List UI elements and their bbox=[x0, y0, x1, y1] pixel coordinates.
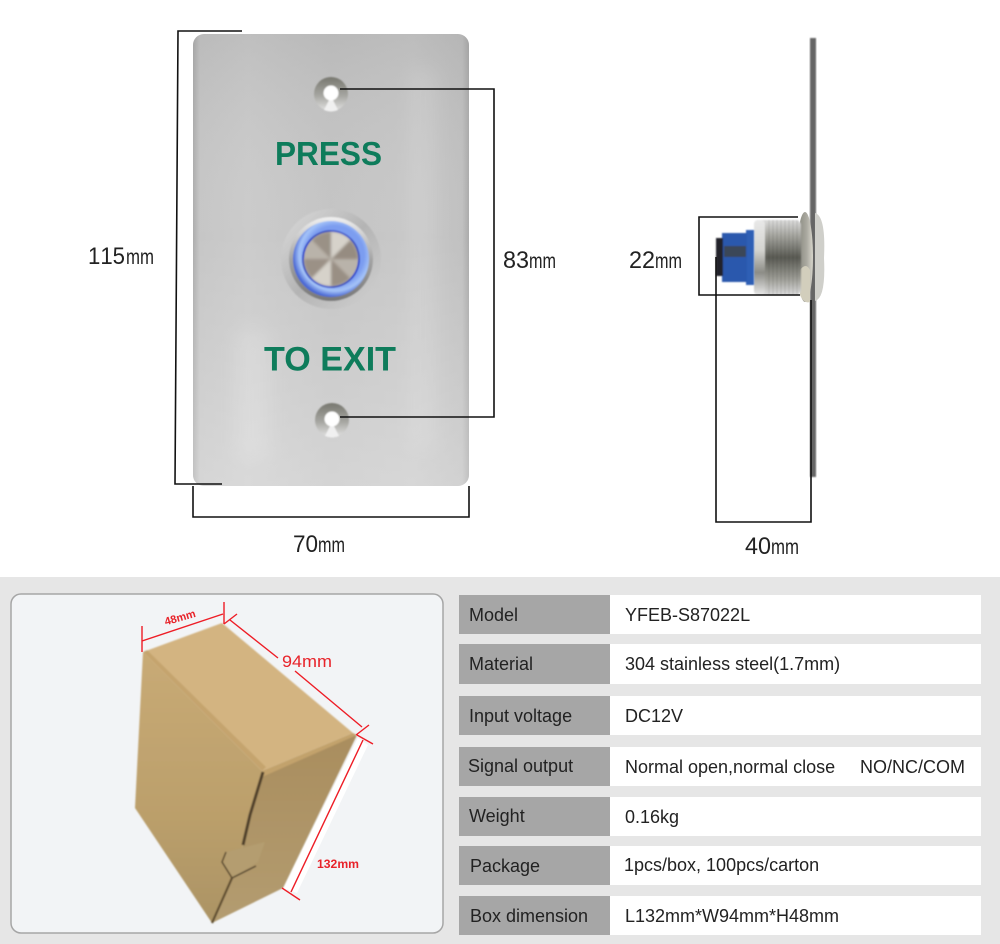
row: Model: YFEB-S87022L bbox=[625, 605, 750, 625]
row: Signal output: Normal open,normal close bbox=[625, 757, 835, 777]
row: Weight: 0.16kg bbox=[625, 807, 679, 827]
row: Box dimension bbox=[459, 896, 981, 935]
dimension: 94mm: 94mm bbox=[282, 652, 332, 671]
dimension: 132mm: 132mm bbox=[317, 859, 359, 871]
dimension: 48mm: 48mm bbox=[163, 608, 197, 628]
row: Package bbox=[459, 846, 981, 885]
dimension: 22mm diameter: mm bbox=[655, 250, 682, 273]
row: Input voltage: DC12V bbox=[625, 706, 683, 726]
dimension: 132mm bbox=[282, 735, 373, 900]
dimension: 48mm bbox=[142, 602, 224, 652]
row: Weight bbox=[459, 797, 981, 836]
threaded body bbox=[754, 220, 801, 295]
panel: side view of button bbox=[716, 38, 824, 477]
blue terminal block bbox=[716, 230, 754, 285]
row: Material: 304 stainless steel(1.7mm) bbox=[625, 654, 840, 674]
row: Signal output: NO/NC/COM bbox=[860, 757, 965, 777]
text: PRESS: PRESS bbox=[275, 135, 382, 172]
panel: steel plate front view bbox=[193, 34, 469, 486]
dimension: 70mm width: mm bbox=[318, 534, 345, 557]
dimension: 115mm height: 115 bbox=[88, 243, 125, 270]
button dome bbox=[815, 213, 824, 301]
text: TO EXIT: TO EXIT bbox=[264, 340, 396, 378]
row: Input voltage bbox=[459, 696, 981, 735]
bottom band background bbox=[0, 577, 1000, 944]
flange bbox=[797, 212, 813, 302]
dimension: 83mm hole spacing: mm bbox=[529, 250, 556, 273]
dimension: 70mm width bbox=[193, 486, 469, 558]
row: Signal output bbox=[459, 747, 981, 786]
dimension: 40mm depth bbox=[716, 257, 811, 560]
dimension: 115mm height bbox=[88, 31, 242, 484]
dimension: 115mm height: mm bbox=[126, 246, 154, 269]
dimension: 83mm hole spacing: 83 bbox=[503, 247, 529, 274]
icon: bottom screw hole bbox=[315, 403, 349, 438]
panel: packaging box photo bbox=[11, 594, 443, 933]
dimension: 40mm depth: mm bbox=[771, 536, 799, 559]
dimension: 70mm width: 70 bbox=[293, 531, 318, 558]
row: Weight: Weight bbox=[469, 806, 525, 826]
row: Model: Model bbox=[469, 605, 518, 625]
row: Model bbox=[459, 595, 981, 634]
row: Box dimension: L132mm*W94mm*H48mm bbox=[625, 906, 839, 926]
row: Box dimension: Box dimension bbox=[470, 906, 588, 926]
row: Material: Material bbox=[469, 654, 533, 674]
row: Package: Package bbox=[470, 856, 540, 876]
dimension: 22mm diameter bbox=[629, 217, 800, 295]
icon: top screw hole bbox=[314, 77, 348, 112]
dimension: 94mm bbox=[224, 614, 369, 735]
dimension: 40mm depth: 40 bbox=[745, 533, 771, 560]
row: Signal output: Signal output bbox=[468, 756, 573, 776]
row: Input voltage: Input voltage bbox=[469, 706, 572, 726]
row: Material bbox=[459, 644, 981, 684]
dimension: 22mm diameter: 22 bbox=[629, 247, 655, 274]
row: Package: 1pcs/box, 100pcs/carton bbox=[624, 855, 819, 875]
illustration: cardboard box bbox=[135, 623, 357, 923]
plate edge bbox=[810, 38, 816, 477]
panel: specification table bbox=[459, 595, 981, 935]
icon: illuminated button bbox=[281, 209, 381, 309]
dimension: 83mm hole spacing bbox=[340, 89, 556, 417]
